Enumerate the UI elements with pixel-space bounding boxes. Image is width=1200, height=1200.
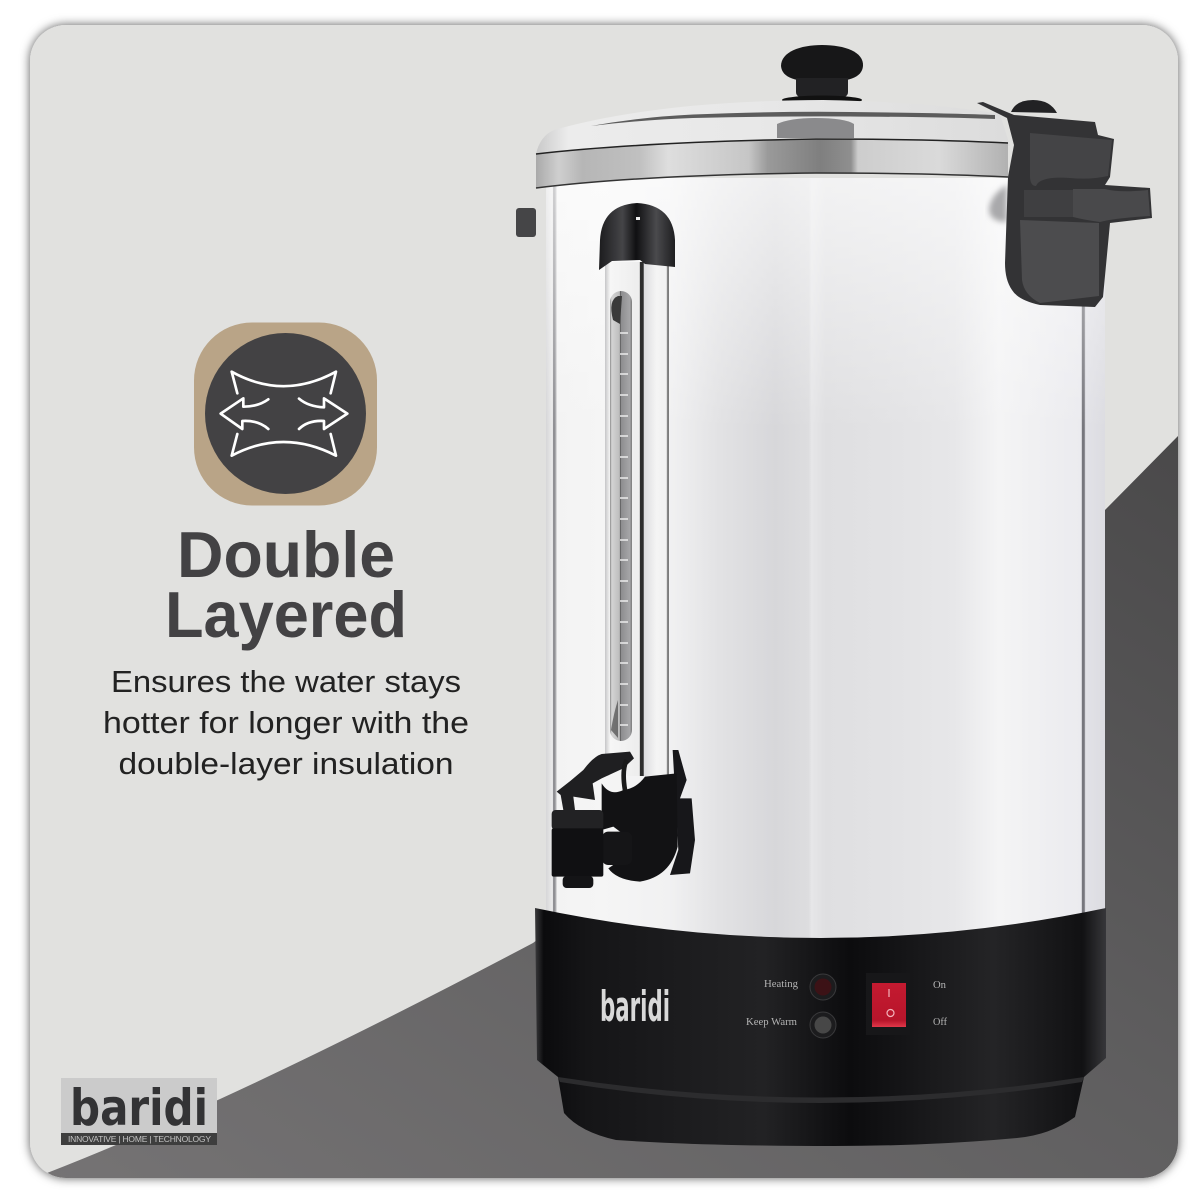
brand logo: INNOVATIVE | HOME | TECHNOLOGY xyxy=(68,1134,211,1144)
urn handle and lid latch xyxy=(977,100,1152,307)
scale ticks xyxy=(620,333,628,725)
right bracket piece xyxy=(670,750,695,875)
sight tube xyxy=(599,203,675,776)
stem reflection xyxy=(624,760,627,790)
J bracket xyxy=(602,773,678,882)
indicator lights xyxy=(810,974,836,1038)
tube cap xyxy=(599,203,675,270)
description text: double-layer insulation xyxy=(118,746,454,781)
handle shadow xyxy=(989,185,1007,222)
urn lid xyxy=(536,100,1010,188)
description text: hotter for longer with the xyxy=(103,705,469,740)
urn side tab xyxy=(516,208,536,237)
knurled collar xyxy=(552,810,603,830)
heading: Double xyxy=(177,518,395,591)
base foot ridge xyxy=(558,1077,1084,1103)
lever xyxy=(557,752,634,810)
red power switch xyxy=(866,973,910,1035)
spout xyxy=(602,832,632,865)
icon circle xyxy=(205,333,366,494)
water window xyxy=(610,291,632,741)
heading: Layered xyxy=(165,578,407,651)
description text: Ensures the water stays xyxy=(111,664,461,699)
icon glyph: outward arrows xyxy=(221,372,347,456)
dark diagonal background shape xyxy=(47,436,1178,1178)
urn knob xyxy=(781,45,863,104)
control labels: Off xyxy=(933,1016,947,1028)
control labels: On xyxy=(933,979,946,991)
cap highlight xyxy=(636,217,640,220)
nozzle xyxy=(563,876,593,888)
valve body xyxy=(552,828,603,877)
control labels: Heating xyxy=(764,978,798,990)
product: water boiler urn xyxy=(516,45,1152,1146)
icon: double layer arrows badge xyxy=(194,322,377,506)
brand logo: baridi xyxy=(70,1079,208,1137)
base brand text: baridi xyxy=(600,982,670,1031)
urn body xyxy=(546,178,1105,938)
urn black base xyxy=(535,908,1106,1146)
icon backing: tan rounded square xyxy=(194,322,377,506)
spigot tap xyxy=(552,750,695,888)
control labels: Keep Warm xyxy=(746,1016,797,1028)
control labels xyxy=(746,978,947,1028)
